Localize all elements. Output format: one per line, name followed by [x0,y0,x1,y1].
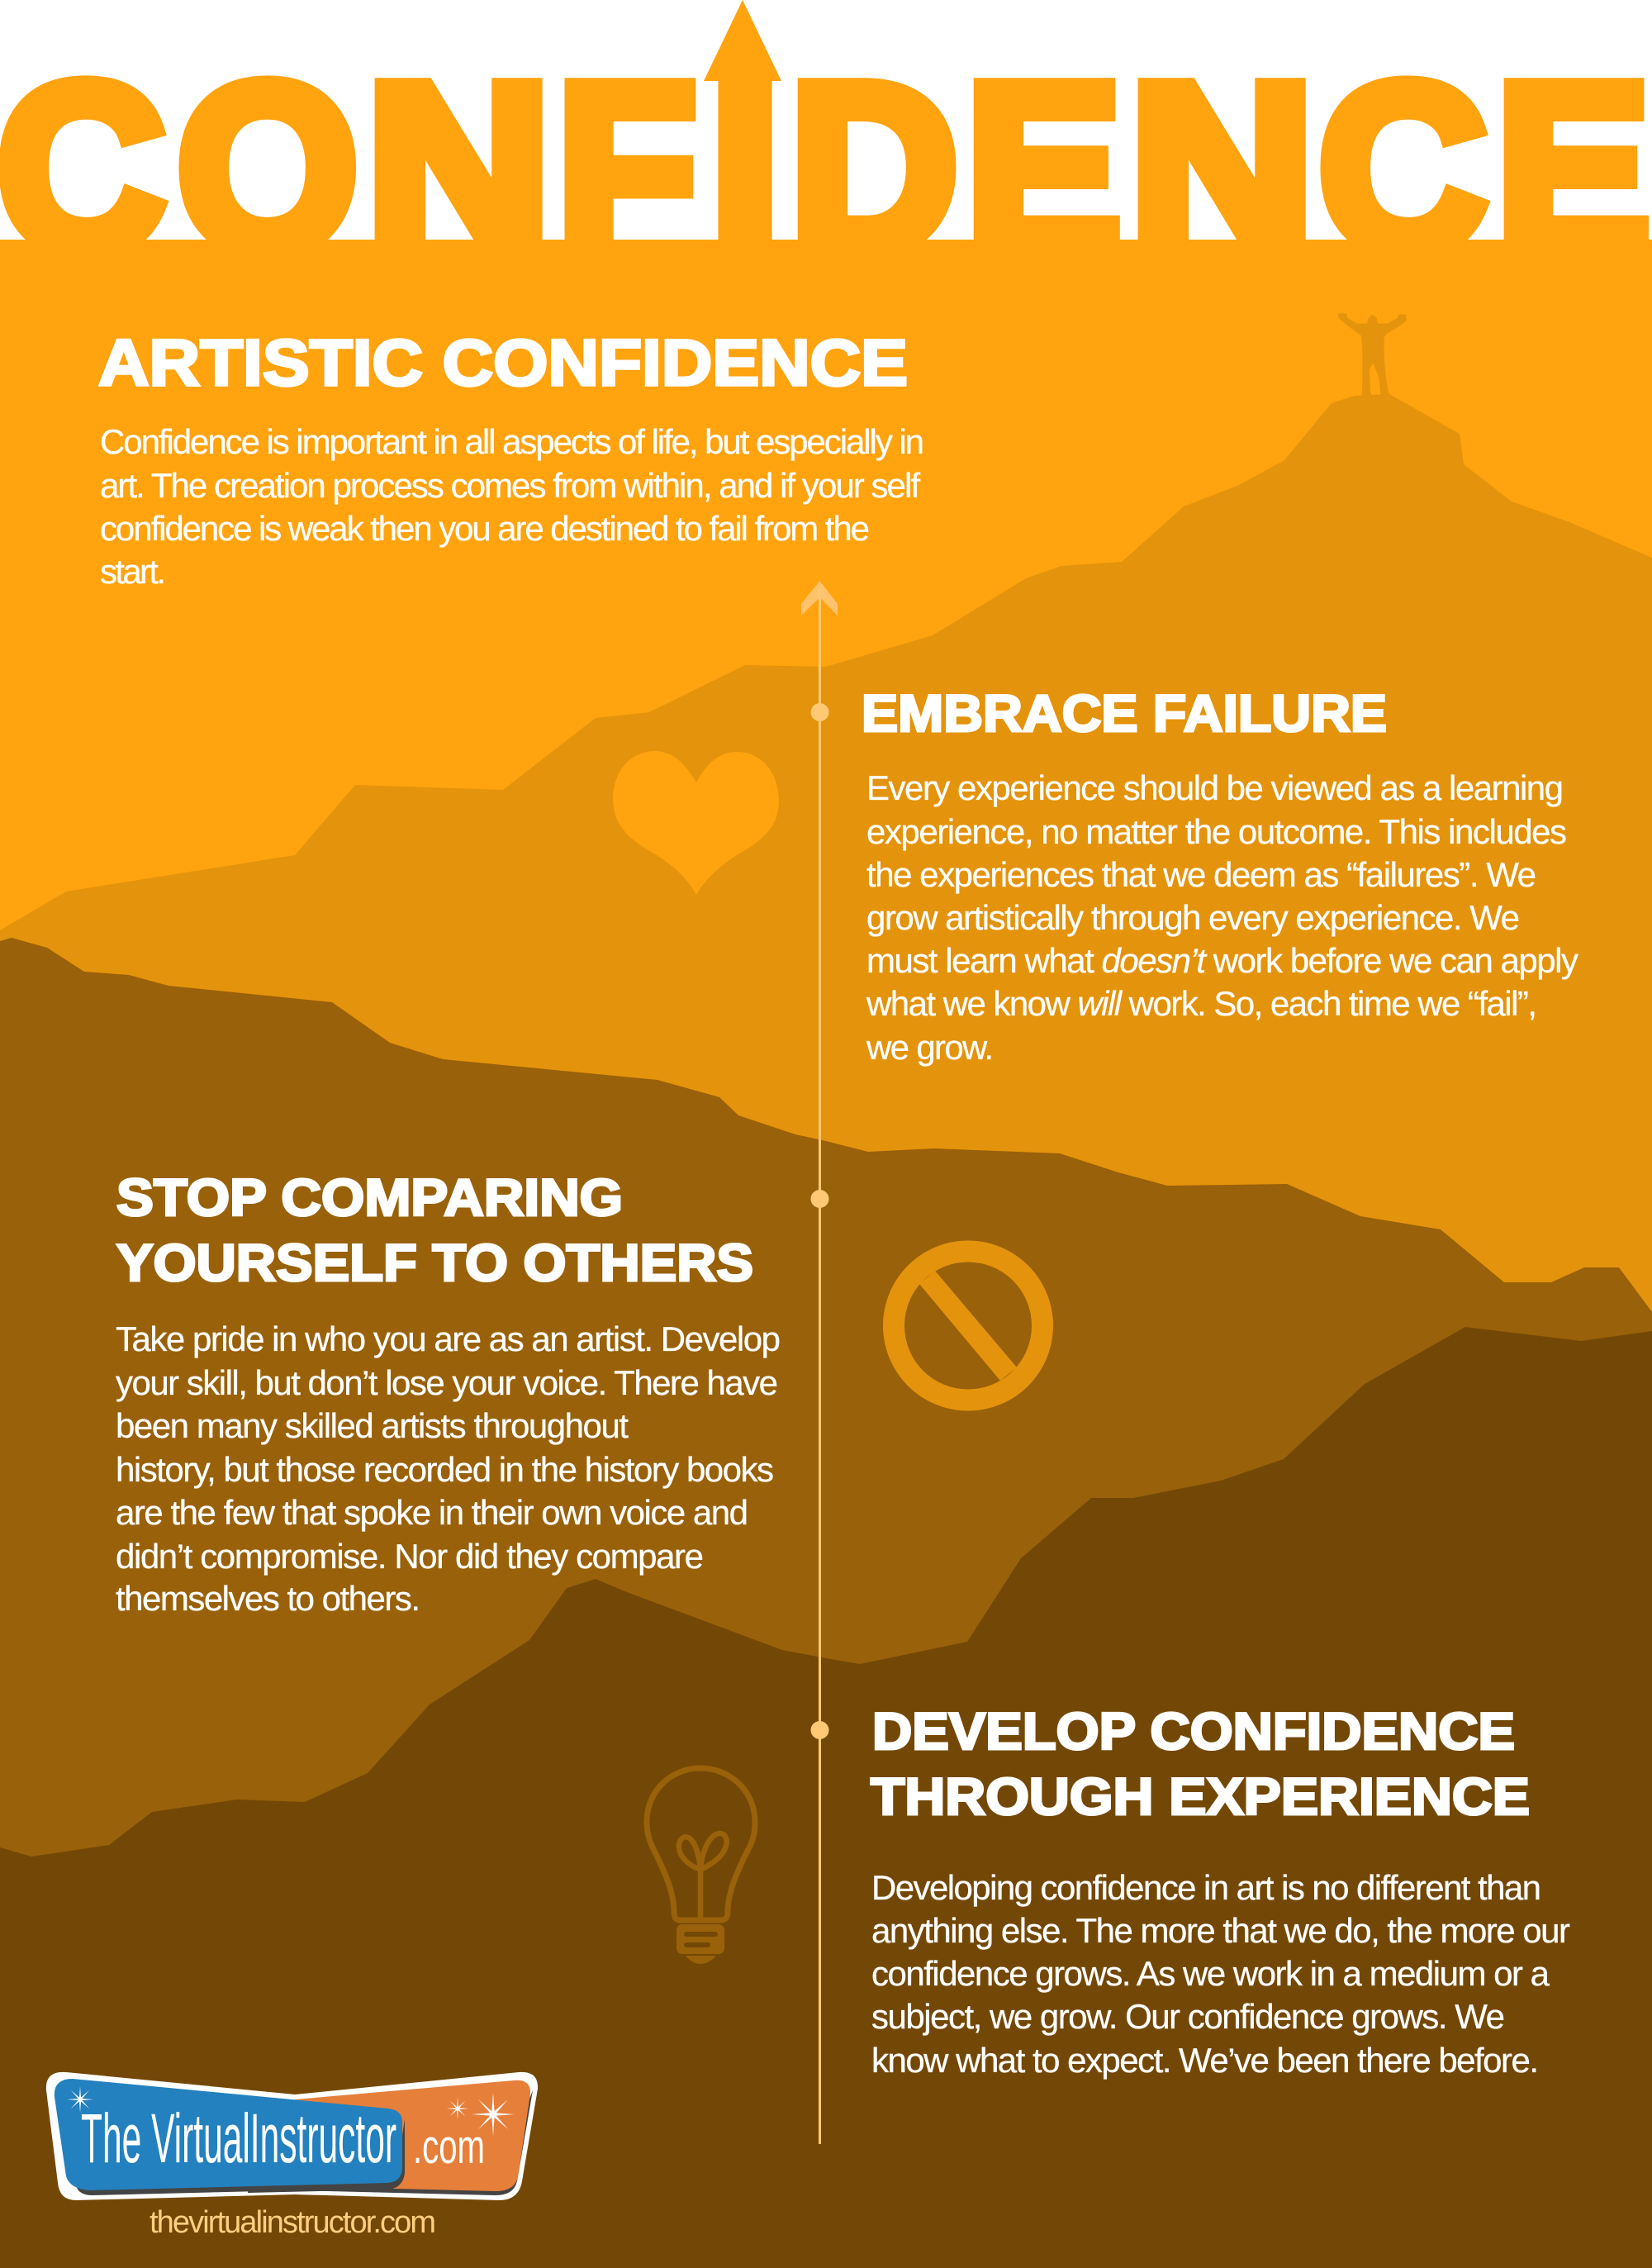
heading: Stop Comparing Yourself to Others [116,1169,753,1292]
text block: Embrace Failure body: experience, no matter the outcome. This includes [866,812,1567,851]
title: CONFIDENCE: N [367,36,550,302]
icon: heart [613,751,779,895]
mountain layer: dark foreground ridge [0,1327,1652,2268]
text block: Stop Comparing body: history, but those recorded in the history books [116,1450,774,1489]
text block: Stop Comparing body: Take pride in who you are as an artist. Develop [116,1319,781,1358]
text block: Develop Confidence body [871,1868,1570,2080]
title: CONFIDENCE: E [966,36,1121,302]
heading: Develop Confidence Through Experience: DEVELOP CONFIDENCE [872,1703,1515,1761]
text block: Embrace Failure body [866,768,1578,1067]
text block: Develop Confidence body: subject, we grow. Our confidence grows. We [871,1997,1505,2036]
text block: Artistic Confidence body: art. The creation process comes from within, and if your self [100,466,920,505]
heading: Embrace Failure: EMBRACE FAILURE [862,685,1387,743]
icon: person with raised arms on the summit [1338,313,1406,396]
text block: Stop Comparing body: your skill, but don’t lose your voice. There have [116,1363,778,1402]
text block: Artistic Confidence body: confidence is weak then you are destined to fail from the [100,509,870,548]
title: CONFIDENCE: I [710,35,780,301]
text block: Embrace Failure body: Every experience should be viewed as a learning [866,768,1564,807]
title: CONFIDENCE: F [558,35,696,301]
text block: Develop Confidence body: anything else. The more that we do, the more our [871,1911,1570,1950]
mountain layer: mid ridge [0,938,1652,2268]
title: CONFIDENCE: E [1497,35,1650,301]
text block: Stop Comparing body [116,1319,781,1618]
text block: Develop Confidence body: Developing confidence in art is no different than [871,1868,1541,1907]
text block: Embrace Failure body: the experiences that we deem as “failures”. We [866,855,1536,894]
logo: The Virtual Instructor badge [46,2072,538,2200]
text block: Develop Confidence body: confidence grows. As we work in a medium or a [871,1954,1550,1993]
text block: Artistic Confidence body: start. [100,552,166,591]
heading: Stop Comparing Yourself to Others: YOURSELF TO OTHERS [116,1234,753,1292]
text block: Embrace Failure body: we grow. [866,1028,994,1067]
title: CONFIDENCE: O [178,36,358,302]
icon: light bulb [647,1768,755,1964]
title: CONFIDENCE: D [790,36,957,302]
heading: Artistic Confidence: ARTISTIC CONFIDENCE [98,326,908,399]
text block: Embrace Failure body: must learn what doesn’t work before we can apply [866,941,1578,980]
text block: Stop Comparing body: been many skilled artists throughout [116,1406,629,1445]
text block: Develop Confidence body: know what to expect. We’ve been there before. [871,2041,1539,2080]
timeline: vertical line with arrow and dots [801,581,838,2144]
text block: Stop Comparing body: are the few that spoke in their own voice and [116,1493,748,1532]
logo .com: .com [413,2120,485,2174]
footer url: thevirtualinstructor.com [150,2205,436,2240]
text block: Embrace Failure body: grow artistically through every experience. We [866,898,1520,937]
heading: Develop Confidence Through Experience: THROUGH EXPERIENCE [871,1768,1530,1826]
title: CONFIDENCE: C [1319,36,1486,302]
text block: Artistic Confidence body: Confidence is important in all aspects of life, but especially in [100,422,924,461]
text block: Artistic Confidence body [100,422,924,591]
text block: Embrace Failure body: what we know will work. So, each time we “fail”, [866,984,1537,1023]
heading: Develop Confidence Through Experience [871,1703,1530,1826]
title: CONFIDENCE: N [1130,36,1313,302]
icon: arrow head on the letter I [704,0,781,81]
text block: Stop Comparing body: themselves to others. [116,1579,420,1618]
logo wordmark: The VirtualInstructor [81,2099,396,2177]
icon: prohibition sign [894,1251,1042,1400]
text block: Stop Comparing body: didn’t compromise. Nor did they compare [116,1537,704,1576]
title: CONFIDENCE [0,35,1650,302]
logo stars [67,2086,515,2136]
title: CONFIDENCE: C [0,36,164,302]
heading: Stop Comparing Yourself to Others: STOP COMPARING [116,1169,623,1227]
